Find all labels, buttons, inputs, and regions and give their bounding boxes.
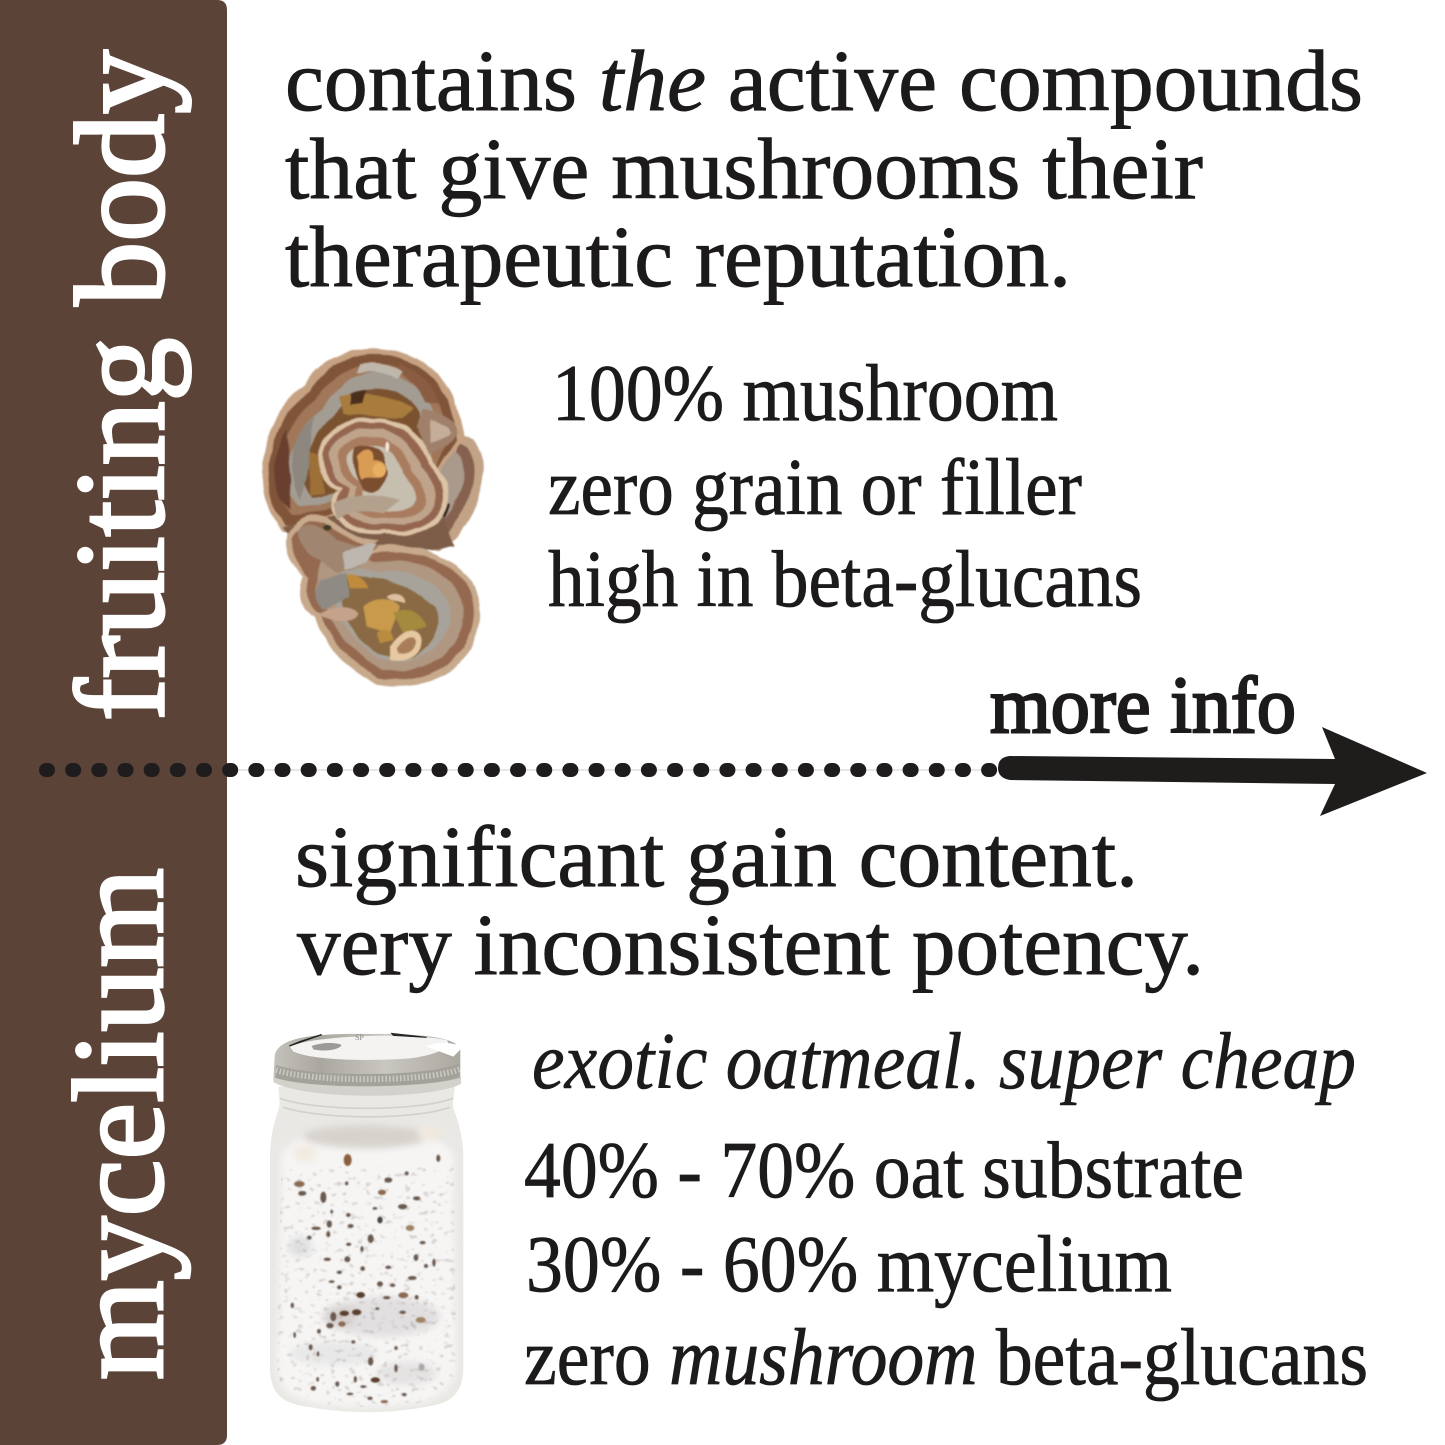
jar shaded patches <box>288 1125 442 1385</box>
text block: mycelium facts <box>524 1125 1368 1402</box>
text block: fruiting body facts: zero grain or filler <box>548 442 1082 532</box>
text block: fruiting body facts: high in beta-glucans <box>548 534 1142 624</box>
icon: turkey tail mushroom <box>262 348 483 686</box>
jar lid: SP <box>355 1033 364 1042</box>
side label: mycelium: mycelium <box>47 868 190 1380</box>
text block: fruiting body facts: 100% mushroom <box>552 348 1058 438</box>
text block: mycelium facts: 40% - 70% oat substrate <box>524 1125 1244 1215</box>
jar neck rings <box>280 1098 453 1117</box>
text block: mycelium facts: 30% - 60% mycelium <box>526 1219 1172 1309</box>
arrow <box>998 727 1427 816</box>
text block: mycelium tagline: exotic oatmeal. super cheap <box>532 1016 1356 1106</box>
more info label: more info <box>990 662 1296 750</box>
text block: mycelium facts: zero mushroom beta-glucans <box>524 1312 1368 1402</box>
jar speckle texture <box>277 1167 457 1407</box>
panel: brown side bar <box>0 0 227 1445</box>
text block: mycelium description: very inconsistent potency. <box>297 896 1204 993</box>
jar glass body <box>270 1087 463 1412</box>
text block: fruiting body description: contains the active compounds <box>285 32 1363 129</box>
text block: fruiting body description: that give mushrooms their <box>285 120 1203 217</box>
text block: mycelium description <box>295 808 1204 993</box>
side label: fruiting body: fruiting body <box>51 50 191 721</box>
jar lid <box>273 1033 463 1096</box>
jar white contents <box>277 1128 457 1407</box>
text block: fruiting body description <box>285 32 1363 305</box>
text block: fruiting body facts <box>548 348 1142 624</box>
grain seeds <box>291 1154 440 1403</box>
mushroom highlights <box>318 442 427 661</box>
icon: mycelium jar <box>270 1033 463 1412</box>
dotted divider line <box>46 769 995 771</box>
text block: fruiting body description: therapeutic reputation. <box>285 208 1071 305</box>
text block: mycelium description: significant gain content. <box>295 808 1138 905</box>
